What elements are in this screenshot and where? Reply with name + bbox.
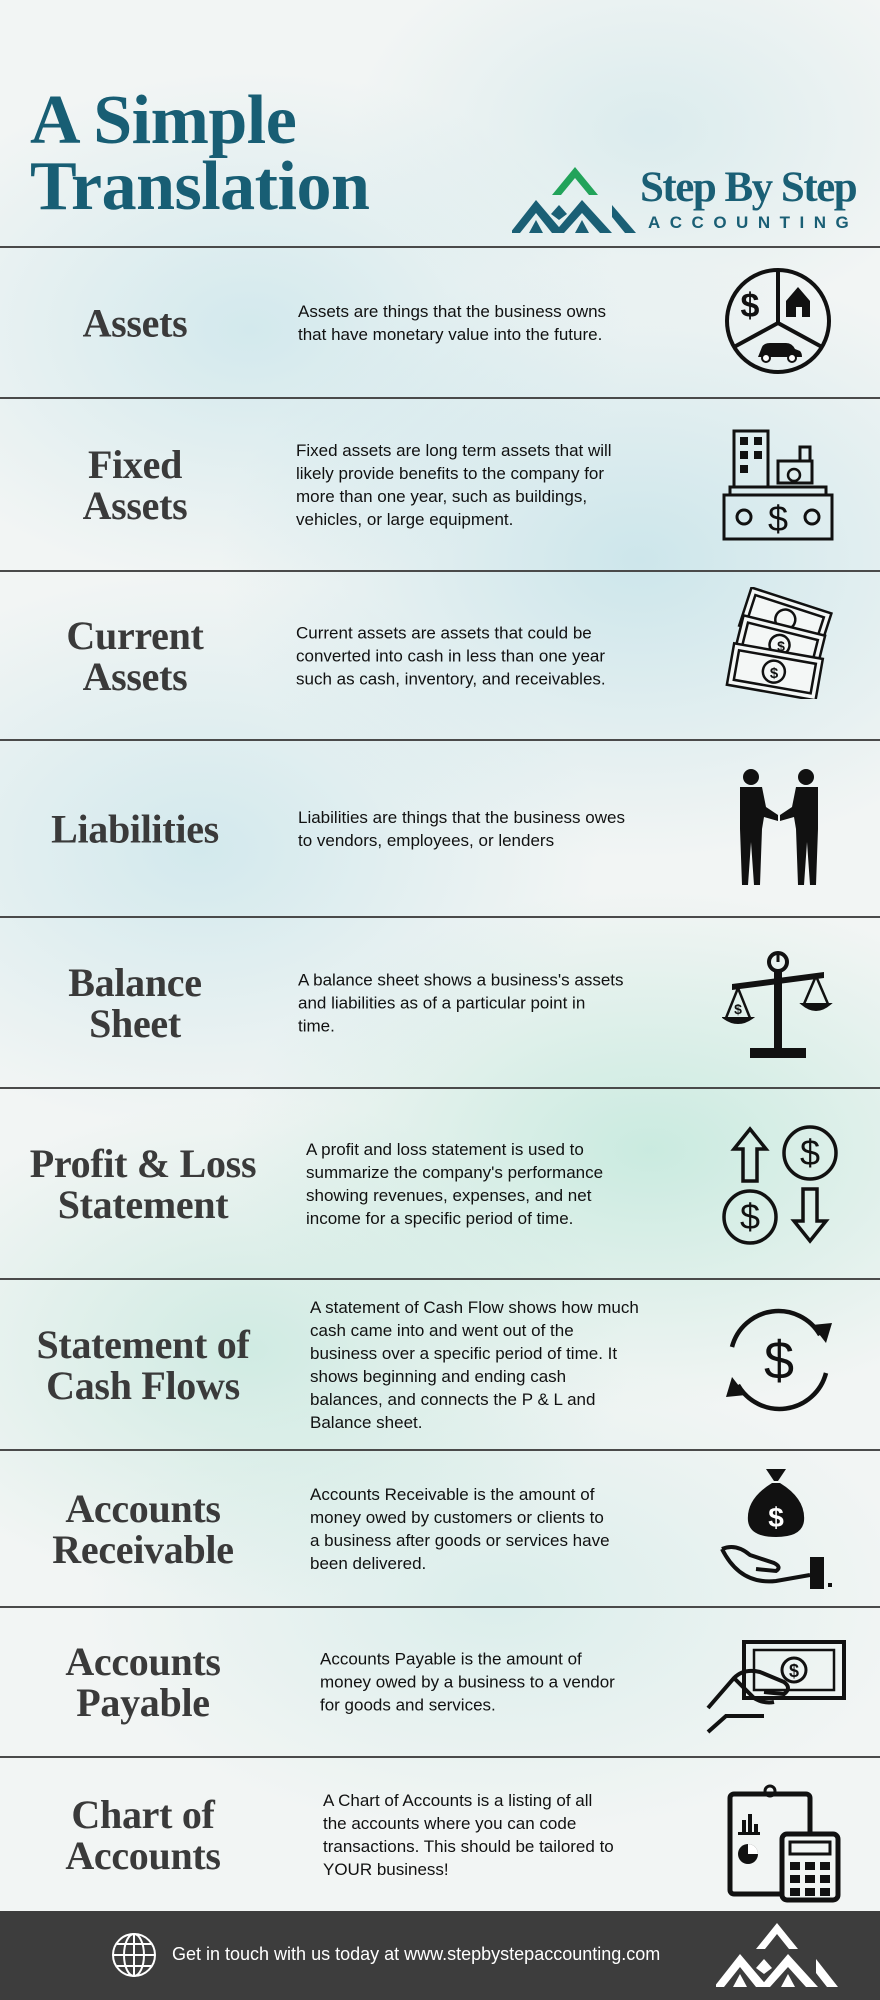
heading: fixed assets: Assets [83, 482, 187, 528]
text: chart of accounts: the accounts where you can code [323, 1814, 576, 1832]
heading: current assets [66, 612, 204, 698]
text: fixed assets [296, 440, 612, 528]
text: current assets: Current assets are assets that could be [296, 623, 592, 642]
text: cash flows [310, 1298, 639, 1432]
heading: chart of accounts: Accounts [65, 1832, 221, 1878]
text: fixed assets: likely provide benefits to the company for [296, 464, 604, 482]
title: Translation [30, 148, 369, 225]
text: chart of accounts [323, 1790, 614, 1878]
text: accounts receivable: a business after goods or services have [310, 1530, 610, 1550]
text: accounts receivable: money owed by customers or clients to [310, 1508, 604, 1526]
icon: globe [110, 1931, 158, 1979]
text: cash flows: Balance sheet. [310, 1412, 422, 1432]
icon: hand with bill: $ [789, 1661, 799, 1681]
text: profit and loss [306, 1140, 603, 1228]
icon: handshake [740, 769, 818, 885]
text: cash flows: business over a specific period of time. It [310, 1344, 617, 1362]
heading: balance sheet: Balance [68, 960, 202, 1004]
text: liabilities: to vendors, employees, or lenders [298, 830, 554, 850]
panel: cash flows [36, 1298, 832, 1432]
text: cash flows: shows beginning and ending cash [310, 1366, 566, 1386]
icon: pie with dollar house car: $ [741, 287, 760, 325]
icon: hand with money bag: $ [768, 1502, 784, 1533]
heading: profit and loss: Statement [58, 1182, 228, 1226]
heading: cash flows [36, 1322, 250, 1408]
text: accounts payable [320, 1650, 615, 1714]
icon: hand with money bag [720, 1469, 832, 1589]
logo text: Step By Step [640, 164, 856, 211]
heading: fixed assets: Fixed [88, 442, 182, 486]
text: fixed assets: Fixed assets are long term assets that will [296, 440, 612, 460]
text: chart of accounts: A Chart of Accounts is a listing of all [323, 1790, 592, 1810]
heading: liabilities: Liabilities [51, 806, 219, 851]
text: fixed assets: vehicles, or large equipment. [296, 510, 513, 528]
text: accounts receivable: been delivered. [310, 1554, 426, 1572]
text: liabilities [298, 808, 625, 850]
text: liabilities: Liabilities are things that the business owes [298, 808, 625, 826]
heading: profit and loss [30, 1140, 256, 1226]
heading: profit and loss: Profit & Loss [30, 1140, 256, 1186]
text: accounts payable: for goods and services. [320, 1696, 496, 1714]
text: assets [298, 302, 606, 344]
heading: accounts receivable: Receivable [52, 1526, 234, 1572]
text: profit and loss: income for a specific period of time. [306, 1208, 573, 1228]
panel: profit and loss [30, 1125, 838, 1245]
icon: cash bills: $ [770, 665, 779, 682]
panel: chart of accounts [65, 1784, 840, 1902]
icon: arrows and dollars: $ [740, 1196, 760, 1237]
text: chart of accounts: YOUR business! [323, 1860, 449, 1878]
text: current assets: converted into cash in less than one year [296, 646, 605, 665]
heading: chart of accounts: Chart of [71, 1792, 215, 1836]
heading: fixed assets [83, 442, 187, 528]
icon: clipboard and calculator [726, 1784, 842, 1904]
text: cash flows: balances, and connects the P & L and [310, 1390, 595, 1408]
panel: accounts receivable [52, 1469, 832, 1589]
icon: pie with dollar house car [725, 268, 831, 374]
heading: current assets: Current [66, 612, 204, 658]
heading: balance sheet [68, 960, 202, 1046]
panel: current assets [66, 587, 833, 699]
panel: fixed assets [83, 430, 834, 540]
title: A Simple [30, 82, 296, 159]
icon: white logo [716, 1921, 838, 1989]
icon: building and equipment [722, 430, 834, 540]
heading: accounts receivable: Accounts [65, 1486, 221, 1530]
text: accounts receivable [310, 1484, 610, 1572]
text: chart of accounts: transactions. This should be tailored to [323, 1836, 614, 1856]
logo: ACCOUNTING [648, 213, 858, 232]
text: balance sheet [298, 970, 624, 1035]
text: cash flows: cash came into and went out of the [310, 1320, 574, 1340]
heading: cash flows: Cash Flows [46, 1362, 240, 1408]
icon: logo mountains [512, 167, 636, 233]
text: accounts receivable: Accounts Receivable is the amount of [310, 1484, 594, 1504]
panel: liabilities [51, 769, 818, 885]
heading: cash flows: Statement of [36, 1322, 250, 1366]
text: balance sheet: time. [298, 1016, 335, 1035]
text: current assets [296, 623, 606, 688]
text: profit and loss: A profit and loss statement is used to [306, 1140, 584, 1158]
text: profit and loss: summarize the company's performance [306, 1162, 603, 1182]
heading: accounts receivable [52, 1486, 234, 1572]
text: accounts payable: money owed by a business to a vendor [320, 1672, 615, 1692]
icon: building and equipment: $ [768, 498, 788, 539]
heading: accounts payable [65, 1639, 221, 1725]
heading: chart of accounts [65, 1792, 221, 1878]
panel: assets [83, 268, 831, 374]
text: profit and loss: showing revenues, expenses, and net [306, 1186, 591, 1204]
icon: arrows and dollars: $ [800, 1132, 820, 1173]
logo [512, 164, 858, 233]
icon: scale [722, 951, 833, 1058]
text: accounts payable: Accounts Payable is the amount of [320, 1650, 582, 1668]
text: fixed assets: more than one year, such as buildings, [296, 486, 587, 506]
panel: accounts payable [65, 1639, 846, 1734]
text: current assets: such as cash, inventory, and receivables. [296, 669, 606, 688]
footer text: Get in touch with us today at www.stepbystepaccounting.com [172, 1944, 660, 1964]
panel: balance sheet [68, 951, 833, 1058]
heading: balance sheet: Sheet [89, 1000, 181, 1046]
icon: scale: $ [734, 1001, 742, 1017]
text: balance sheet: and liabilities as of a particular point in [298, 993, 585, 1012]
heading: accounts payable: Accounts [65, 1639, 221, 1684]
text: assets: that have monetary value into the future. [298, 324, 602, 344]
icon: arrows and dollars [722, 1125, 838, 1245]
heading: current assets: Assets [83, 654, 187, 698]
heading: accounts payable: Payable [76, 1680, 210, 1725]
icon: circular arrows dollar: $ [764, 1331, 794, 1391]
icon: cash bills [725, 587, 833, 699]
icon: hand with bill [706, 1640, 846, 1734]
icon: circular arrows dollar [726, 1308, 832, 1412]
text: balance sheet: A balance sheet shows a business's assets [298, 970, 624, 989]
text: assets: Assets are things that the business owns [298, 302, 606, 320]
title [30, 82, 369, 225]
text: cash flows: A statement of Cash Flow shows how much [310, 1298, 639, 1316]
icon: cash bills: $ [777, 638, 785, 654]
footer [0, 1911, 880, 2000]
heading: assets: Assets [83, 300, 187, 345]
